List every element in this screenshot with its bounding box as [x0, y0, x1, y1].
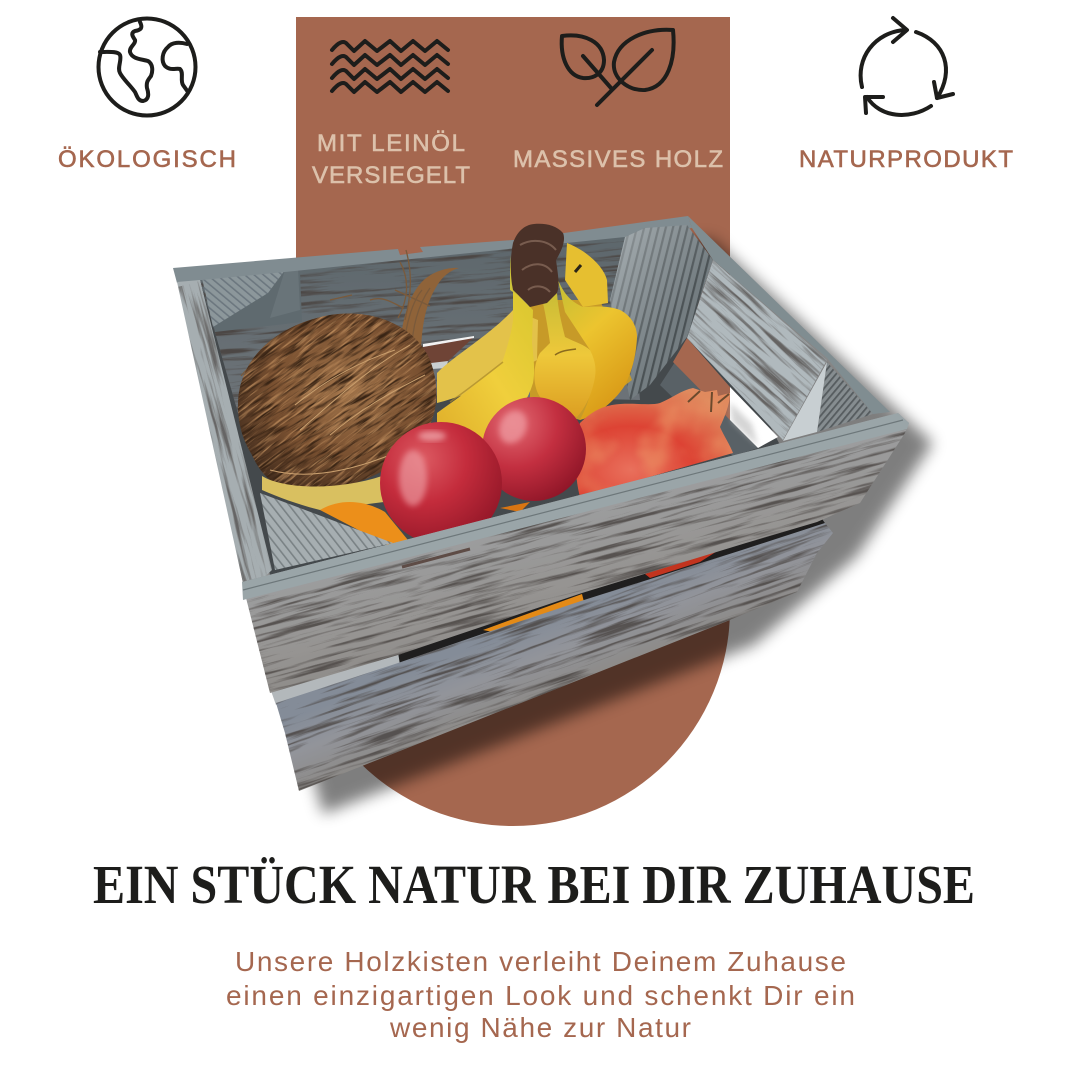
- crate left side board: [177, 280, 272, 582]
- body text: einen einzigartigen Look und schenkt Dir ein: [226, 980, 855, 1011]
- label: massives holz: MASSIVES HOLZ: [513, 146, 723, 173]
- right gap: arch visible: [673, 338, 778, 448]
- feature: naturprodukt: [799, 18, 1013, 173]
- body text: wenig Nähe zur Natur: [389, 1012, 691, 1043]
- fruit: yellow under coconut and orange: [262, 476, 530, 548]
- label: ökologisch: ÖKOLOGISCH: [58, 146, 236, 173]
- label: mit leinöl versiegelt: [312, 130, 470, 189]
- icon: recycle arrows: [861, 18, 953, 115]
- crate back wall: [200, 237, 640, 414]
- feature: mit leinöl versiegelt: [312, 41, 470, 189]
- crate back-left corner block: [202, 268, 302, 332]
- label: naturprodukt: NATURPRODUKT: [799, 146, 1013, 173]
- banana crown: [511, 224, 564, 307]
- crate with fruit: [173, 216, 909, 791]
- fruit: pomegranate: [576, 388, 733, 495]
- fruit: bananas: [437, 224, 637, 440]
- crate lower front board: [276, 523, 833, 791]
- feature: ökologisch: [58, 18, 236, 173]
- panel: brown arch background: [296, 17, 730, 826]
- fruit: red apples: [380, 397, 586, 544]
- body text: Unsere Holzkisten verleiht Deinem Zuhause: [235, 946, 846, 977]
- crate shadow: [197, 239, 933, 814]
- crate right-front corner: [783, 362, 873, 441]
- crate front-left corner triangle: [260, 493, 393, 570]
- crate right side board: [687, 260, 827, 440]
- icon: waves: [332, 41, 448, 92]
- title: EIN STÜCK NATUR BEI DIR ZUHAUSE: [93, 854, 975, 915]
- crate back rim: [173, 216, 692, 283]
- crate interior: [200, 235, 780, 575]
- icon: globe: [98, 18, 196, 116]
- crate right rim: [688, 216, 890, 414]
- feature: massives holz: [513, 30, 723, 173]
- gap between front boards: [270, 516, 827, 705]
- upper board rim: [242, 413, 909, 600]
- icon: leaves: [562, 30, 674, 105]
- fruit: coconut: [238, 250, 459, 486]
- crate back-right corner block: [610, 225, 713, 400]
- crate right lower board: [660, 362, 758, 456]
- crate upper front board: [242, 413, 909, 693]
- label: mit leinöl versiegelt: VERSIEGELT: [312, 162, 470, 189]
- body text: [226, 946, 855, 1043]
- label: mit leinöl versiegelt: MIT LEINÖL: [317, 130, 465, 157]
